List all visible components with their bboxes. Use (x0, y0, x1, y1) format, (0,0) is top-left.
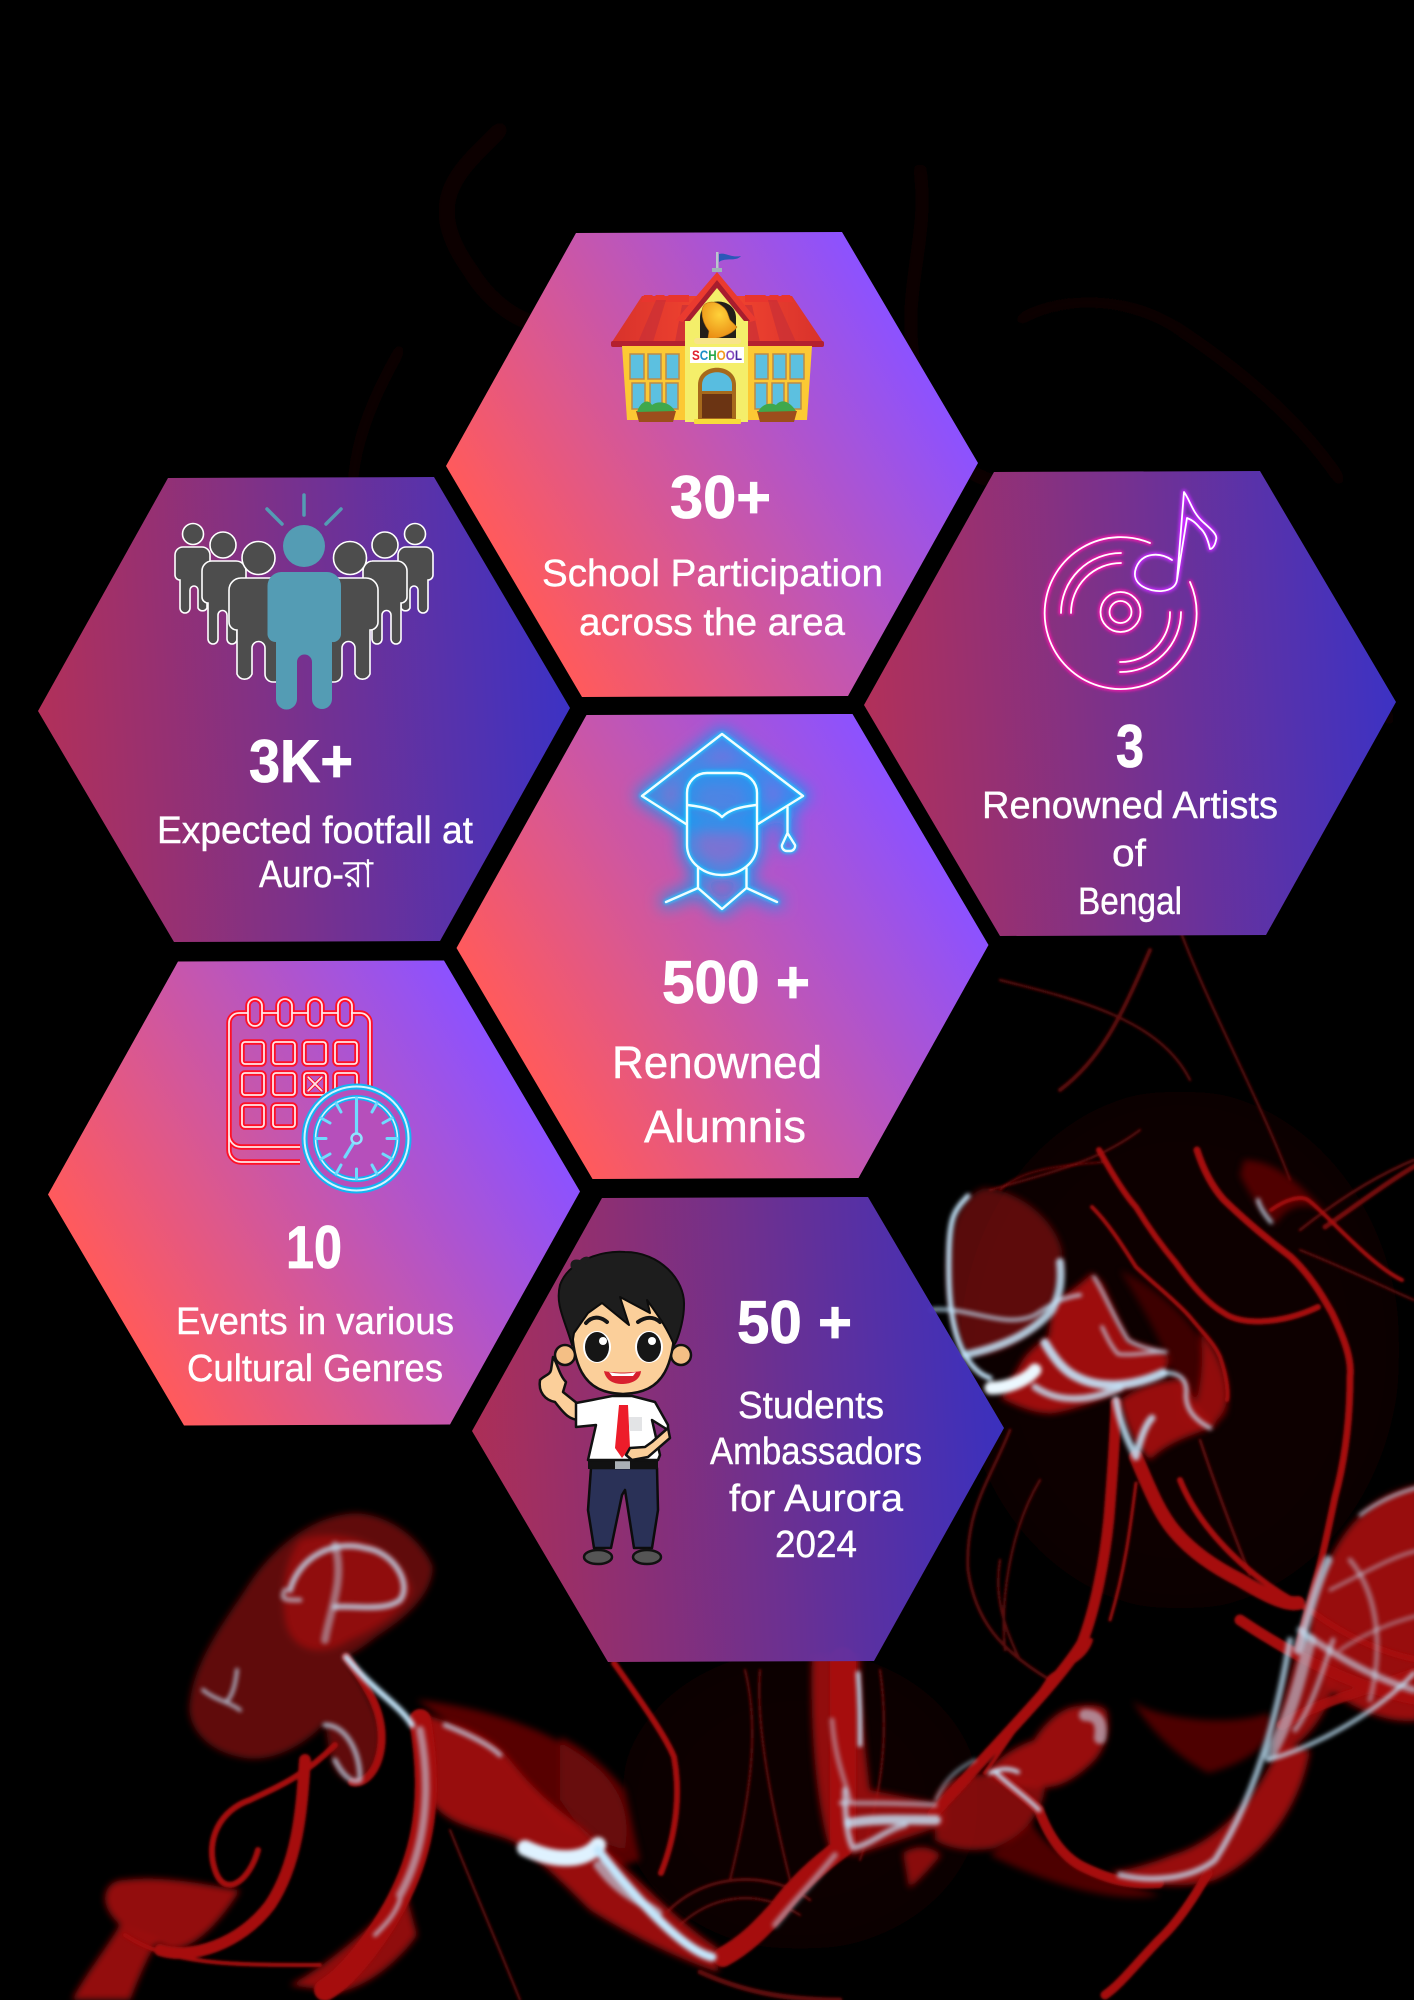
caption line 2: Cultural Genres (187, 1348, 443, 1390)
caption: Expected footfall at (157, 810, 473, 852)
caption line 2: across the area (579, 602, 846, 644)
caption: Renowned Artists (982, 785, 1278, 827)
icon: neon music disc (1045, 492, 1216, 689)
stat: 30+: 30+ (670, 464, 771, 531)
icon: cartoon student (540, 1252, 691, 1564)
caption line 2: Alumnis (644, 1101, 806, 1152)
caption line 2: of (1112, 833, 1146, 875)
caption line 3: for Aurora (729, 1478, 904, 1520)
hexagon background (472, 1197, 1004, 1662)
caption line 2: Auro-রা (259, 854, 374, 896)
panel: renowned artists (864, 471, 1396, 936)
faint smoke at the top (352, 130, 1390, 720)
smoke: solid red masses (72, 1188, 1414, 2000)
stat: 10: 10 (286, 1214, 342, 1281)
hexagon background (456, 714, 988, 1179)
smoke: red ribbons (125, 1150, 1414, 1995)
caption: Renowned (612, 1037, 822, 1088)
panel: school participation (446, 232, 978, 697)
panel: expected footfall (38, 477, 570, 942)
panel: renowned alumnis (456, 714, 988, 1179)
panel: cultural events (48, 960, 580, 1426)
caption: Events in various (176, 1301, 454, 1343)
icon: crowd of people (175, 495, 433, 710)
caption line 2: Ambassadors (710, 1431, 922, 1473)
stat: 50 +: 50 + (737, 1289, 852, 1356)
caption: School Participation (542, 553, 883, 595)
hexagon background (446, 232, 978, 697)
stat: 500 +: 500 + (662, 949, 810, 1016)
hexagon background (864, 471, 1396, 936)
smoke: pale blue highlights (203, 1196, 1414, 1957)
stat: 3: 3 (1116, 713, 1144, 780)
school sign: SCHOOL (692, 347, 742, 363)
caption line 4: 2024 (775, 1524, 857, 1566)
caption line 3: Bengal (1078, 881, 1182, 923)
hexagon background (38, 477, 570, 942)
panel: student ambassadors (472, 1197, 1004, 1662)
faint maroon haze behind the smoke (620, 1090, 1400, 1950)
stat: 3K+: 3K+ (249, 728, 353, 795)
faint strands (450, 930, 1414, 2000)
dim red masses (417, 1160, 1335, 1897)
icon: neon graduate (642, 734, 803, 909)
caption: Students (738, 1385, 884, 1427)
icon: school building (611, 252, 824, 424)
hexagon background (48, 960, 580, 1426)
icon: neon calendar (229, 999, 408, 1190)
